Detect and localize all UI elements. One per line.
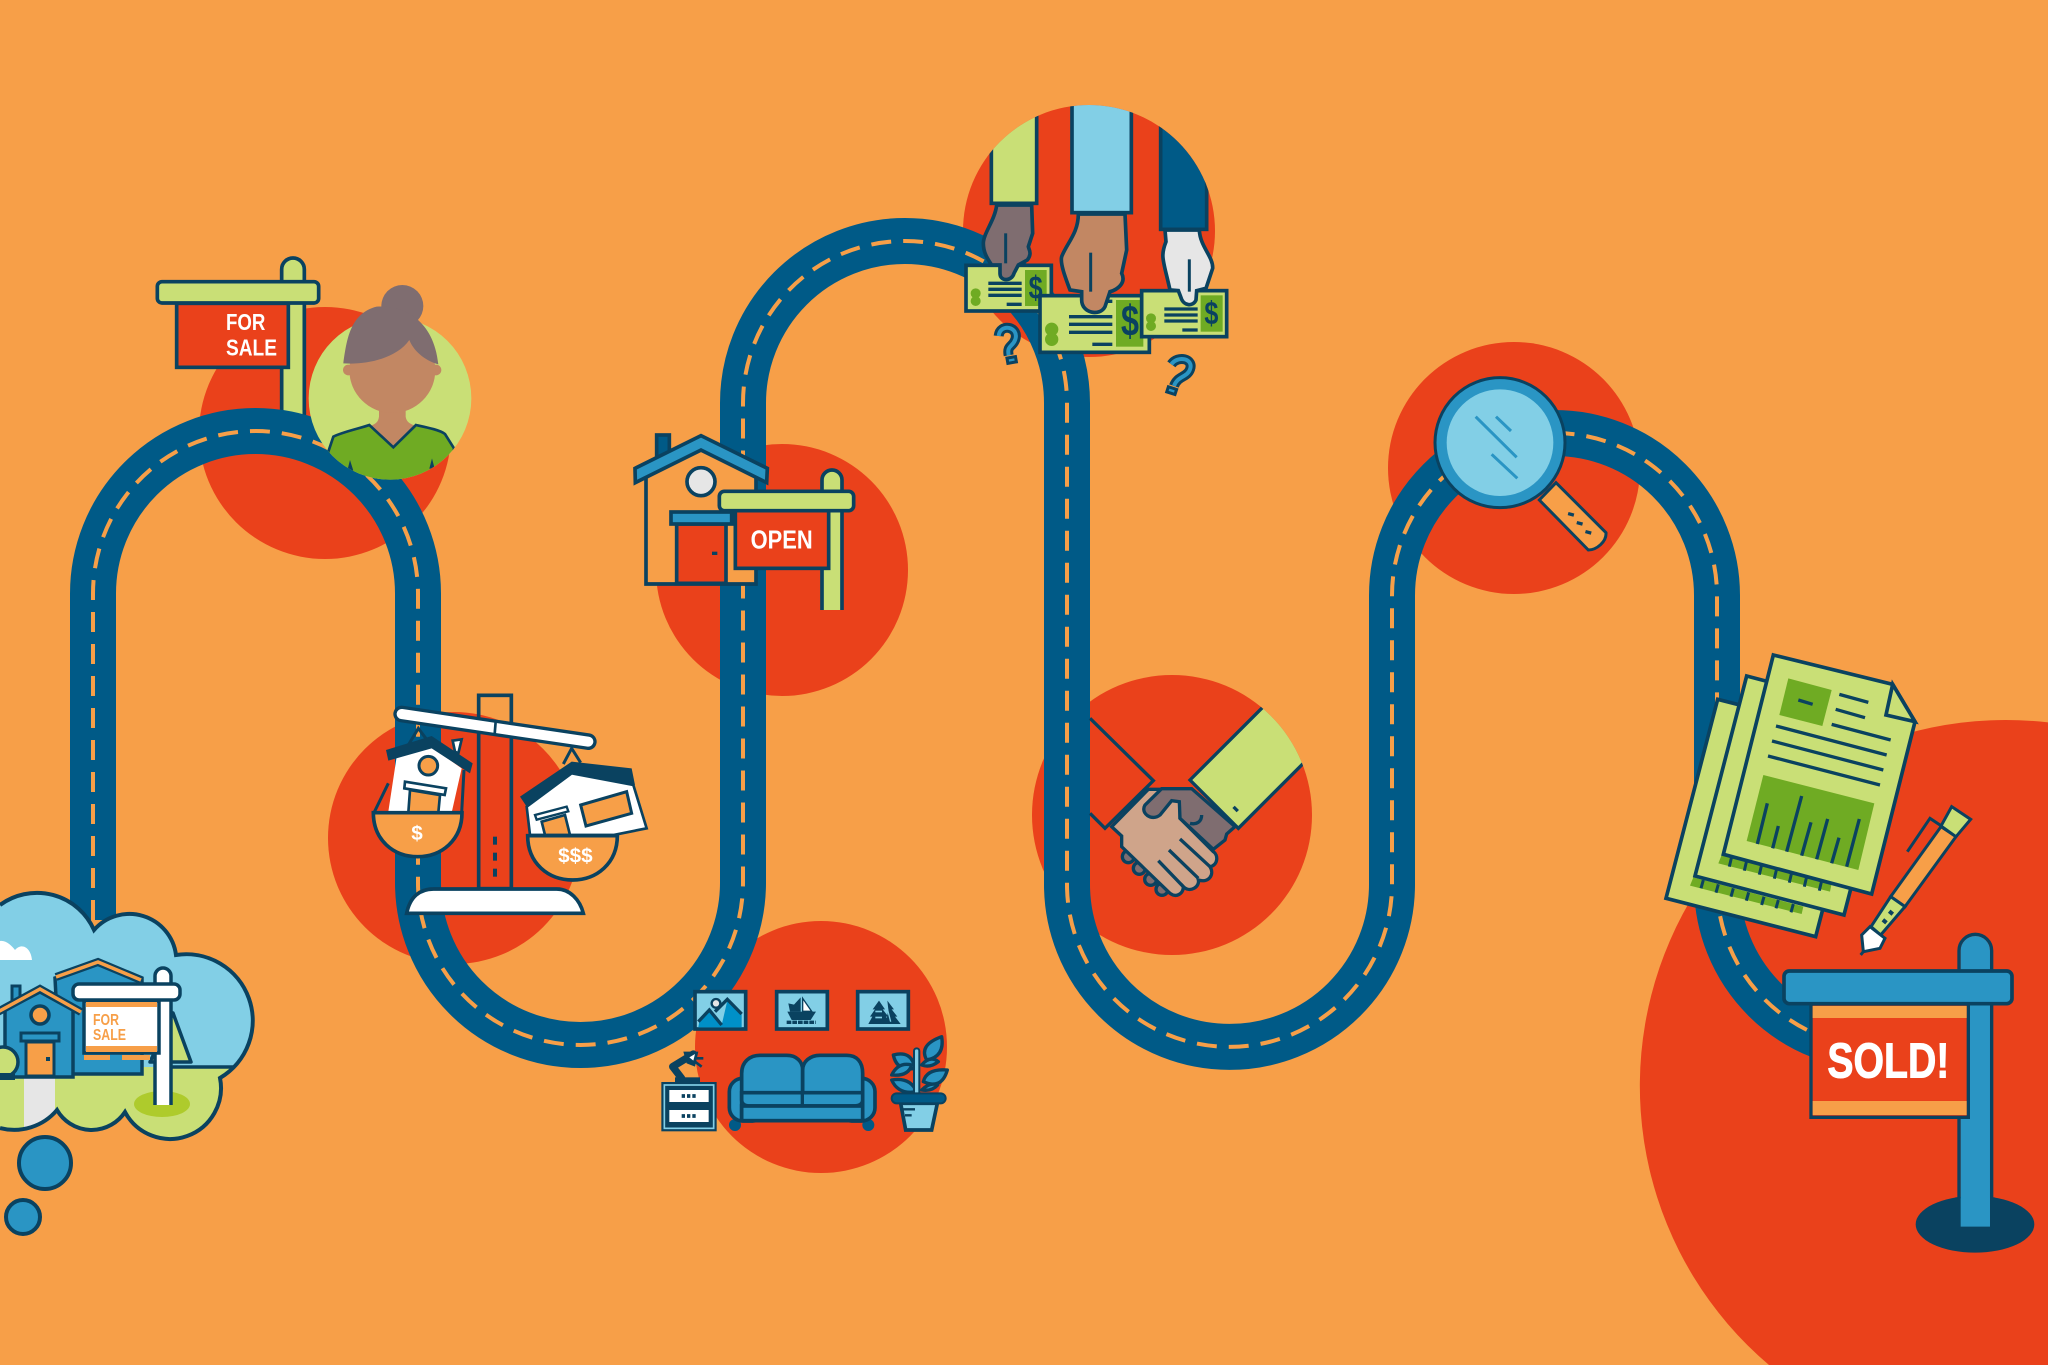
- back sheet: [1666, 699, 1867, 937]
- back hand fingers: [1122, 851, 1168, 895]
- back hand thumb: [1144, 789, 1235, 849]
- middle sheet: [1695, 676, 1896, 915]
- offer check one: $: [1029, 270, 1043, 306]
- for sale text: FOR: [226, 309, 265, 335]
- right sleeve: [1188, 706, 1303, 831]
- thought cloud with dream house: SALE: [93, 1027, 126, 1044]
- dream sign: [156, 970, 170, 1105]
- front hand: [1112, 789, 1217, 895]
- icon: competing offers with hands: [966, 93, 1227, 395]
- icon: balance scale with houses: [373, 695, 647, 913]
- thought bubbles: [19, 1137, 71, 1189]
- triple dollar: $$$: [558, 845, 593, 868]
- sofa: [729, 1055, 875, 1131]
- question mark one: [999, 328, 1016, 363]
- ground: [0, 1067, 230, 1138]
- picture: sailboat: [777, 992, 827, 1029]
- for sale sign: SALE: [226, 334, 277, 360]
- thought cloud with dream house: FOR: [93, 1012, 119, 1029]
- hand two: [1061, 214, 1127, 312]
- icon: contract documents: [1666, 655, 1971, 955]
- hand three: [1163, 230, 1213, 305]
- icon: magnifying glass: [1435, 378, 1606, 550]
- tree: [150, 1013, 191, 1062]
- left pan: [373, 813, 462, 857]
- right pan: [528, 836, 617, 880]
- pencil: [1861, 807, 1971, 955]
- for sale sign: [157, 258, 319, 431]
- sleeves: [990, 116, 1038, 206]
- left sleeve: [1090, 718, 1153, 828]
- offer check three: $: [1204, 295, 1218, 331]
- offer check two: [1040, 296, 1149, 352]
- offer check three: [1142, 291, 1227, 337]
- back house: [55, 962, 142, 1074]
- icon: handshake: [1089, 706, 1303, 898]
- table lamp: [673, 1052, 703, 1083]
- winding road: [93, 241, 1880, 1047]
- open text: OPEN: [751, 525, 813, 555]
- question mark two: [1167, 359, 1191, 395]
- hand one: [983, 205, 1033, 280]
- offer check two: $: [1121, 298, 1139, 346]
- front sheet: [1723, 655, 1915, 894]
- icon: open house with sign: [635, 435, 854, 610]
- icon: woman portrait: [309, 285, 471, 497]
- picture: trees: [858, 992, 908, 1029]
- bush: [0, 1047, 18, 1077]
- beam: [402, 714, 588, 742]
- left house: [388, 747, 462, 813]
- icon: staged living room: [661, 992, 947, 1131]
- potted plant: [892, 1037, 947, 1130]
- sold text: SOLD!: [1827, 1033, 1949, 1088]
- thought cloud with dream house: [0, 893, 260, 1234]
- picture: mountains: [695, 992, 746, 1029]
- right house: [527, 773, 647, 835]
- hangers: [374, 728, 581, 813]
- nightstand: [661, 1082, 717, 1131]
- small white cloud: [0, 941, 32, 960]
- offer check one: [966, 265, 1051, 311]
- front house: [12, 986, 20, 1004]
- icon: sold sign: [1784, 934, 2034, 1253]
- single dollar: $: [411, 822, 423, 845]
